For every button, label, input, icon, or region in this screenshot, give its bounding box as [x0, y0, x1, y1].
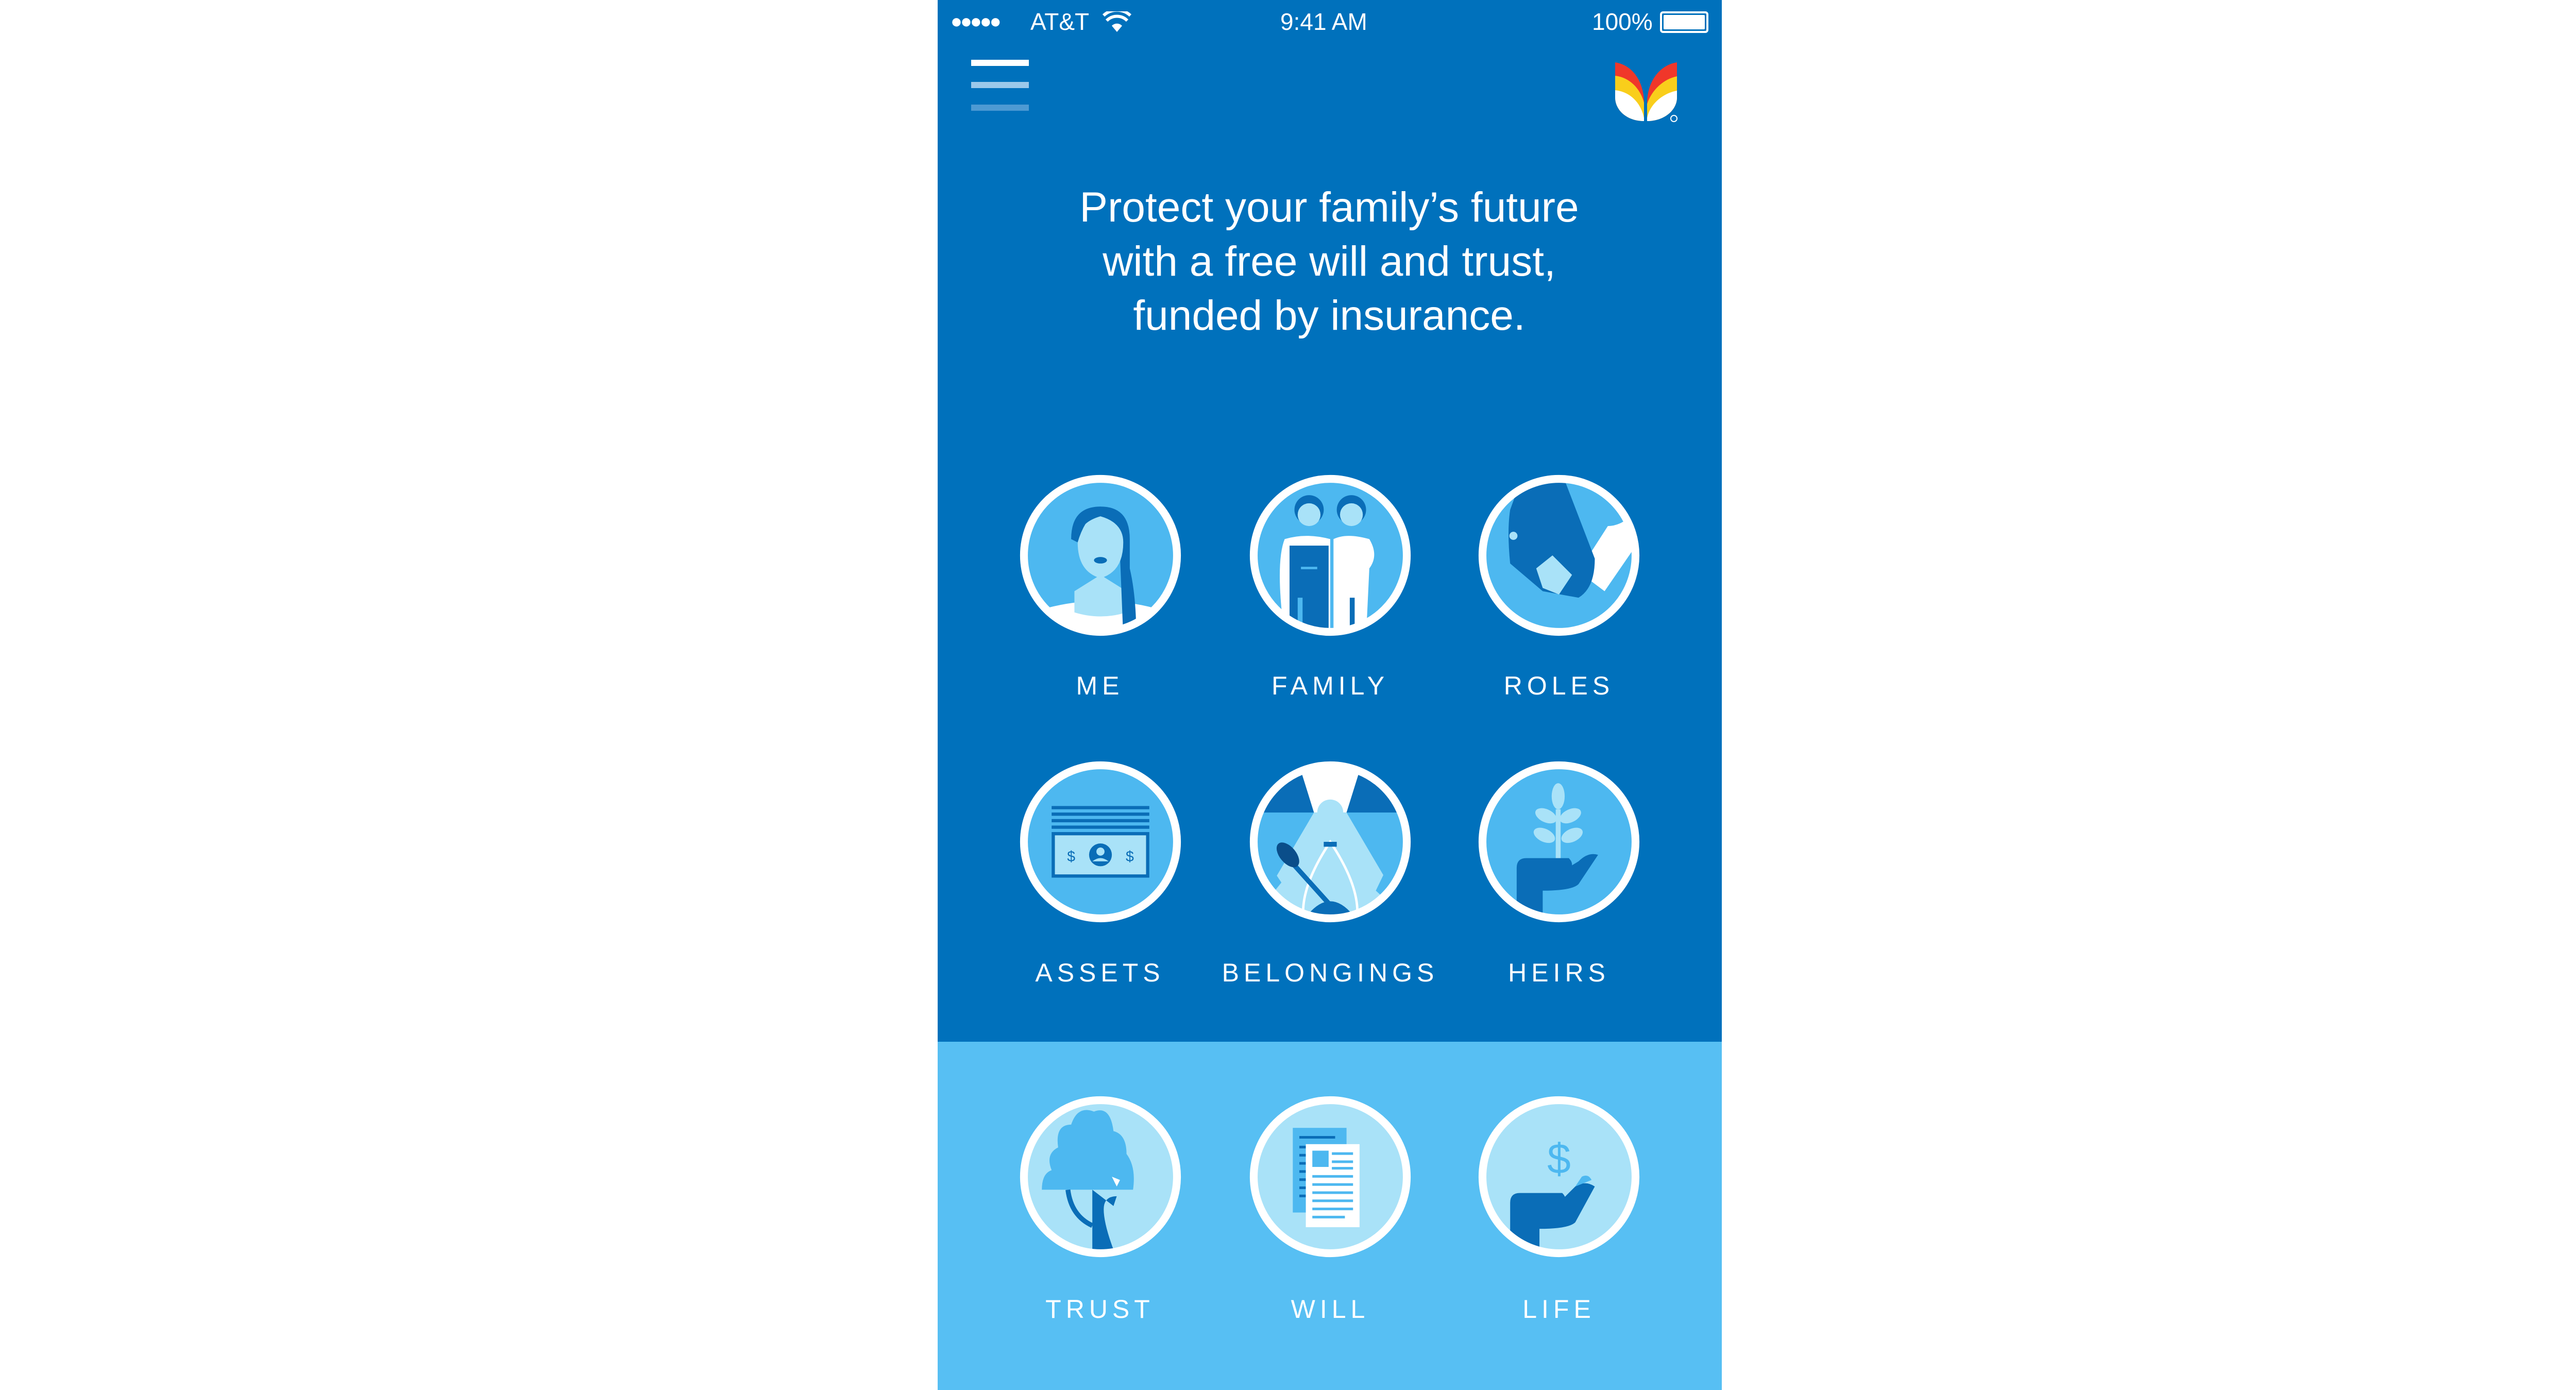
title: Protect your family’s future: [1079, 184, 1579, 231]
icon: LIFE: [1479, 1096, 1639, 1257]
label: HEIRS: HEIRS: [1508, 958, 1610, 987]
phone screen: dark section: [938, 0, 1722, 1042]
title: with a free will and trust,: [1103, 238, 1556, 285]
time: 9:41 AM: [1280, 8, 1367, 35]
label: ASSETS: ASSETS: [1035, 958, 1165, 987]
icon: battery: [1660, 11, 1708, 33]
icon: ASSETS: $: [1126, 849, 1134, 865]
icon: WILL: [1250, 1096, 1411, 1257]
status bar: [951, 8, 1708, 35]
title: funded by insurance.: [1133, 292, 1526, 339]
label: TRUST: TRUST: [1045, 1295, 1155, 1324]
icon: LIFE: $: [1547, 1136, 1571, 1183]
label: ME: ME: [1076, 671, 1124, 700]
icon: HEIRS: [1479, 761, 1639, 922]
icon: hamburger menu: [971, 60, 1029, 111]
label: ROLES: ROLES: [1504, 671, 1614, 700]
icon: FAMILY: [1250, 475, 1411, 636]
icon: BELONGINGS: [1250, 761, 1411, 922]
logo: [1615, 62, 1677, 122]
label: FAMILY: FAMILY: [1272, 671, 1389, 700]
signal dots: ●●●●●: [951, 11, 999, 32]
icon: wifi: [1103, 11, 1131, 32]
phone screen: light section: [938, 1042, 1722, 1390]
icon: ASSETS: $: [1067, 849, 1075, 865]
icon: ASSETS: [1020, 761, 1181, 922]
battery percent: 100%: [1592, 8, 1653, 35]
icon: ME: [1020, 475, 1181, 636]
icon: ROLES: [1479, 475, 1639, 636]
carrier: AT&T: [1030, 8, 1089, 35]
label: LIFE: LIFE: [1522, 1295, 1596, 1324]
icon: TRUST: [1020, 1096, 1181, 1257]
label: BELONGINGS: BELONGINGS: [1222, 958, 1438, 987]
title: [1079, 184, 1579, 339]
label: WILL: WILL: [1291, 1295, 1369, 1324]
